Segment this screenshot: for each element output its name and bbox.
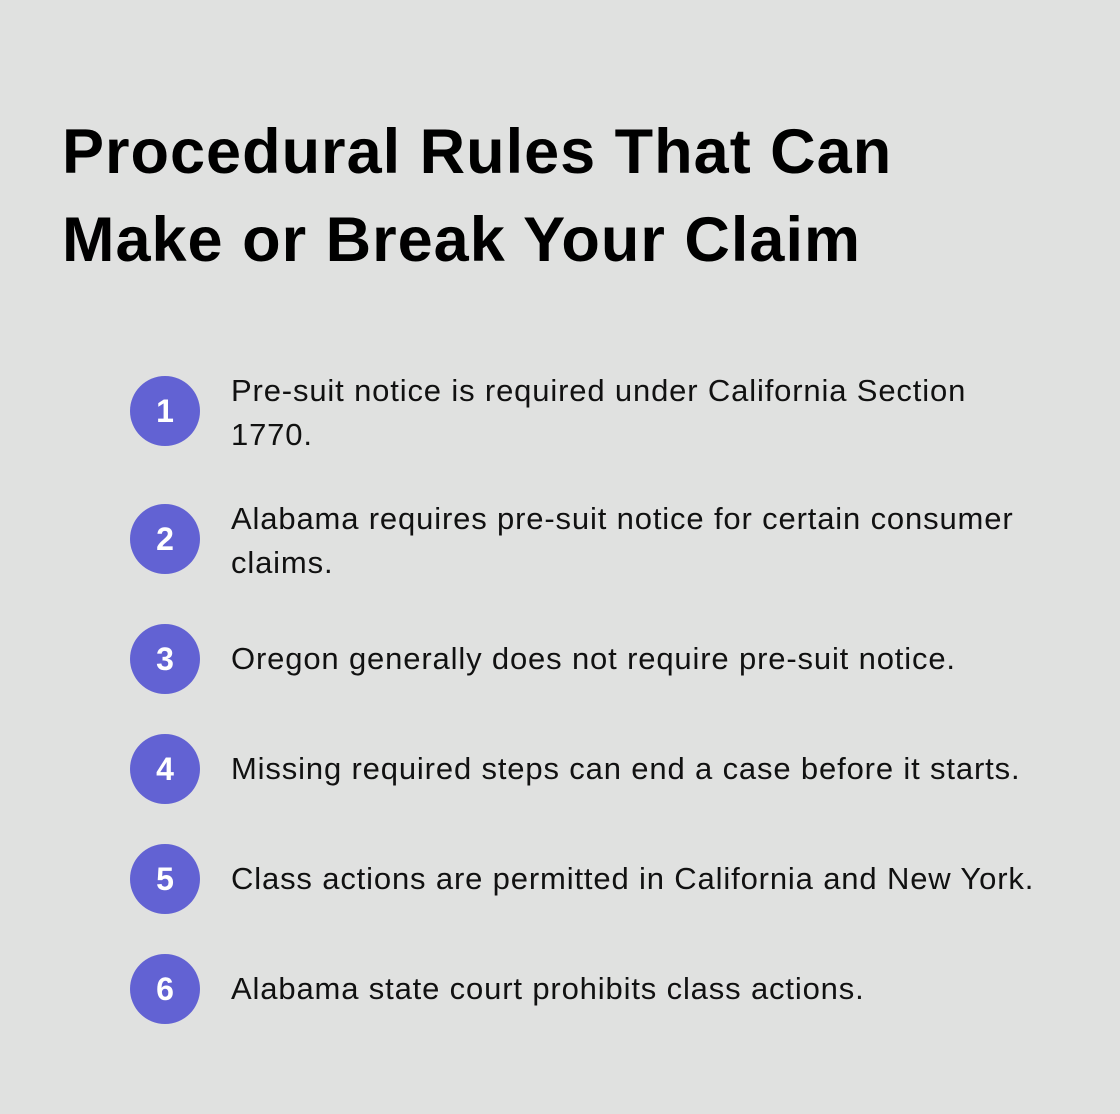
text: 5 [156,861,174,897]
text: 4 [156,751,174,787]
text: Class actions are permitted in California and New York. [231,861,1034,896]
text: Alabama requires pre-suit notice for certain consumer [231,501,1014,536]
title: Procedural Rules That Can [62,117,892,187]
text: 1770. [231,417,313,452]
text: Alabama state court prohibits class actions. [231,971,865,1006]
text: 6 [156,971,174,1007]
text: Pre-suit notice is required under California Section [231,373,966,408]
item 4 [130,734,1020,804]
item 1 [130,373,966,452]
text: Oregon generally does not require pre-suit notice. [231,641,956,676]
title [62,117,892,275]
text: claims. [231,545,333,580]
item 5 [130,844,1034,914]
text: 1 [156,393,174,429]
item 3 [130,624,956,694]
text: 3 [156,641,174,677]
text: Missing required steps can end a case before it starts. [231,751,1020,786]
title: Make or Break Your Claim [62,205,861,275]
text: 2 [156,521,174,557]
item 6 [130,954,865,1024]
item 2 [130,501,1014,580]
